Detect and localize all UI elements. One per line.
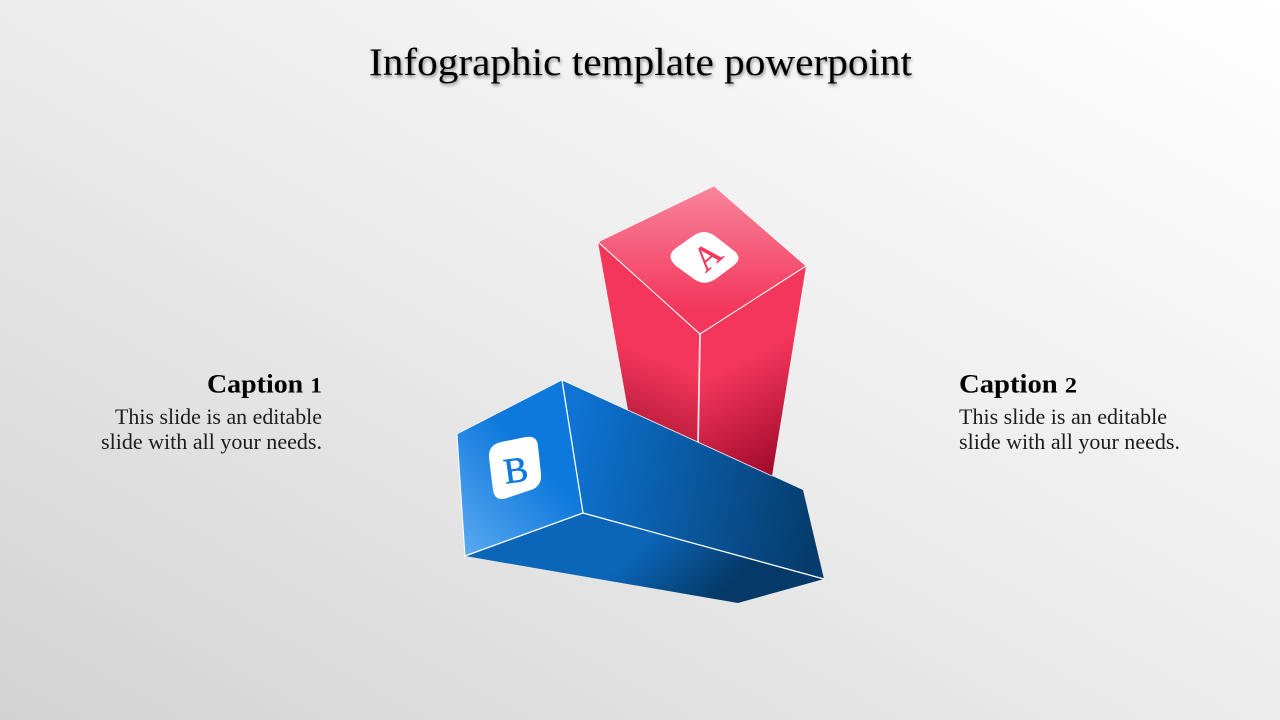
caption 2 body: slide with all your needs.	[959, 429, 1180, 454]
caption 1 body	[101, 404, 322, 454]
blue bar end face	[457, 380, 583, 556]
red bar left face	[598, 242, 700, 445]
caption 1 body: slide with all your needs.	[101, 429, 322, 454]
icon: B badge	[489, 437, 541, 499]
caption 2 body	[959, 404, 1180, 454]
caption 2 body: This slide is an editable	[959, 404, 1167, 429]
text block: caption 2	[959, 370, 1180, 454]
red bar top face	[598, 186, 806, 334]
caption 2 heading: Caption 2	[959, 370, 1077, 398]
text block: caption 1	[101, 370, 322, 454]
blue bar lower face	[465, 513, 824, 603]
caption 1 heading: Caption 1	[207, 370, 322, 398]
icon: B badge: B	[501, 449, 531, 492]
icon: A badge: A	[685, 233, 730, 279]
blue bar	[457, 380, 824, 603]
title: Infographic template powerpoint	[369, 41, 912, 84]
blue bar upper face	[562, 380, 824, 579]
icon: A badge	[670, 232, 738, 283]
red bar	[598, 186, 806, 476]
caption 1 body: This slide is an editable	[115, 404, 322, 429]
red bar right face	[698, 266, 806, 476]
